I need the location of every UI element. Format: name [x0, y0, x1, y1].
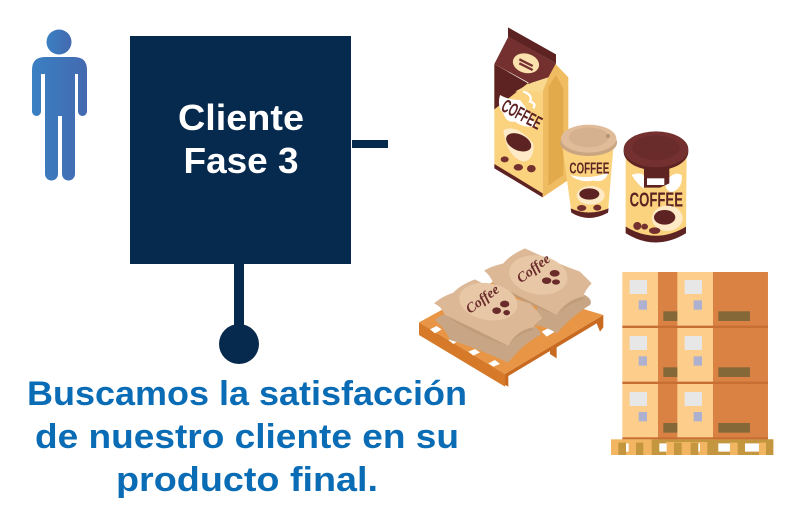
icon: coffee cup	[560, 125, 617, 218]
icon: wooden pallet	[419, 282, 603, 387]
connector: right dash	[352, 140, 388, 148]
text block: satisfaction message: producto final.	[116, 461, 378, 499]
icon: back sack stack	[484, 248, 592, 333]
icon: person	[32, 30, 87, 180]
text block: satisfaction message	[27, 375, 467, 499]
illustration: coffee sacks on pallet	[419, 248, 603, 387]
icon: coffee carton	[494, 27, 568, 197]
icon: back sack stack: Coffee	[514, 252, 554, 287]
icon: wooden pallet base	[611, 439, 773, 455]
icon: front sack stack	[434, 279, 542, 363]
heading: Cliente Fase 3: Fase 3	[184, 140, 298, 181]
icon: coffee can	[624, 131, 688, 242]
icon: front sack stack: Coffee	[463, 282, 503, 317]
text block: satisfaction message: de nuestro cliente en su	[35, 418, 459, 456]
icon: coffee carton: COFFEE	[498, 95, 546, 134]
text block: satisfaction message: Buscamos la satisfacción	[27, 375, 467, 413]
panel: client phase box	[130, 36, 351, 264]
illustration: stacked boxes on pallet	[611, 272, 773, 455]
icon: coffee cup: COFFEE	[569, 160, 610, 177]
heading: Cliente Fase 3	[178, 97, 304, 181]
illustration: coffee products	[494, 27, 688, 242]
connector: line with round end	[219, 264, 259, 364]
icon: box stack	[622, 272, 768, 439]
heading: Cliente Fase 3: Cliente	[178, 97, 304, 138]
icon: coffee can: COFFEE	[630, 189, 683, 212]
